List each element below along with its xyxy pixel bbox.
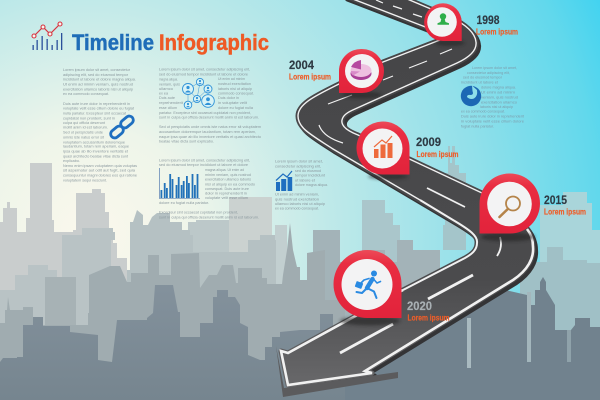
text block: centre column lower: consequat. Duis aute irure xyxy=(205,187,249,191)
road centre dashes xyxy=(319,0,501,353)
text block: far right column: consectetur adipiscing elit, xyxy=(467,71,510,75)
text block: right lower column: ex ea commodo consequat. xyxy=(275,206,319,210)
text block: centre column upper: sed do eiusmod tempor incididunt ut labore et dolore xyxy=(159,72,248,76)
bar chart xyxy=(160,168,200,198)
text block: left column: ex ea commodo consequat. xyxy=(63,92,109,96)
label: 2004 xyxy=(289,60,331,82)
text block: centre column upper: Ut enim ad minim xyxy=(218,77,245,81)
text block: left column: explicabo. xyxy=(63,159,80,163)
label: 2009: 2009 xyxy=(416,137,441,149)
text block: right lower column: consectetur adipiscing elit, xyxy=(275,164,321,168)
text block: left column: omnis iste natus error sit xyxy=(63,136,104,140)
text block: far right column: Lorem ipsum dolor sit amet, xyxy=(472,66,517,70)
title with chart icon xyxy=(32,22,269,55)
text block: left column: sit aspernatur aut odit aut fugit, sed quia xyxy=(63,168,136,172)
text block: far right column: ex ea commodo consequat. xyxy=(461,110,505,114)
text block: centre column upper: beatae vitae dicta sunt explicabo. xyxy=(159,140,214,144)
text block: far right column: in voluptate velit esse cillum dolore xyxy=(461,120,524,124)
label: 2009 xyxy=(416,137,459,159)
label: 2020 xyxy=(407,301,450,322)
text block: far right column: sed do eiusmod tempor xyxy=(463,76,503,80)
icon: running person xyxy=(355,270,380,298)
label: 1998 xyxy=(476,15,518,36)
text block: centre column lower: sed do eiusmod tempor incididunt ut labore et dolore xyxy=(159,163,248,167)
text block: left column: mollit anim id est laborum. xyxy=(63,126,108,130)
text block: centre column upper: ex ea xyxy=(159,92,169,96)
skyline: middle layer xyxy=(0,210,600,400)
text block: left column: Nemo enim ipsam voluptatem quia voluptas xyxy=(63,164,137,168)
text block: centre column lower: dolore eu fugiat nulla pariatur. xyxy=(159,201,209,205)
text block: right lower column: dolore magna aliqua. xyxy=(295,183,328,187)
text block: centre column upper: accusantium doloremque laudantium, totam rem aperiam, xyxy=(159,130,256,134)
text block: centre column upper: Lorem ipsum dolor sit amet, consectetur adipiscing elit, xyxy=(159,68,250,72)
text block: right lower column: sed do eiusmod xyxy=(295,169,321,173)
text block: centre column upper: in voluptate velit xyxy=(218,101,247,105)
label: 1998: Lorem ipsum xyxy=(476,26,518,36)
text block: far right column: fugiat nulla pariatur. xyxy=(461,124,494,128)
text block: left column: Ut enim ad minim veniam, quis nostrud xyxy=(63,82,133,86)
pin: 2015 xyxy=(480,173,540,242)
text block: centre column upper xyxy=(159,68,261,144)
text block: far right column: incididunt ut labore et xyxy=(461,80,498,84)
text block: centre column upper: veniam, quis xyxy=(159,82,180,86)
text block: right lower column: Lorem ipsum dolor sit amet, xyxy=(275,160,323,164)
icon: magnifier xyxy=(500,196,520,217)
text block: left column: quasi architecto beatae vitae dicta sunt xyxy=(63,154,128,158)
text block: left column: consequuntur magni dolores eos qui ratione xyxy=(63,174,137,178)
label: 2020: 2020 xyxy=(407,301,432,313)
text block: centre column upper: eaque ipsa quae ab illo inventore veritatis et quasi architecto xyxy=(159,135,261,139)
text block: left column: incididunt ut labore et dolore magna aliqua. xyxy=(63,78,136,82)
text block: left column: voluptate velit esse cillum dolore eu fugiat xyxy=(63,106,134,110)
text block: far right column: exercitation ullamco xyxy=(481,100,517,104)
label: 2004: 2004 xyxy=(289,60,315,72)
icon: chain link xyxy=(109,114,135,140)
text block: centre column lower: Lorem ipsum dolor sit amet, consectetur adipiscing elit, xyxy=(159,158,250,162)
text block: centre column lower: dolor in reprehenderit in xyxy=(205,192,247,196)
skyline: near layer xyxy=(0,223,345,400)
heading: Timeline xyxy=(72,30,154,55)
text block: centre column lower: minim veniam, quis nostrud xyxy=(205,173,251,177)
text block: left column xyxy=(63,68,137,182)
skyline: front layer xyxy=(0,277,600,400)
text block: left column: culpa qui officia deserunt xyxy=(63,121,105,125)
text block: centre column lower: exercitation ullamco laboris xyxy=(205,178,251,182)
text block: centre column upper: Duis dolor in xyxy=(218,96,239,100)
icon: orange growth bars xyxy=(374,136,392,158)
text block: centre column upper: reprehenderit xyxy=(159,101,183,105)
text block: left column: adipiscing elit, sed do eiusmod tempor xyxy=(63,73,129,77)
road xyxy=(276,0,536,397)
text block: far right column: veniam, quis nostrud xyxy=(481,96,518,100)
text block: centre column upper: commodo consequat. xyxy=(218,92,254,96)
text block: right lower column xyxy=(275,160,328,210)
text block: right lower column: ut labore et xyxy=(295,178,315,182)
text block: centre column upper: Sed ut perspiciatis unde omnis iste natus error sit voluptatem xyxy=(159,125,261,129)
label: 1998: 1998 xyxy=(476,15,500,27)
text block: right lower column: Ut enim ad minim veniam, xyxy=(275,192,319,196)
icon: blue donut pie xyxy=(461,86,481,106)
text block: centre column upper: ullamco xyxy=(159,87,173,91)
title with chart icon: Infographic xyxy=(159,30,269,55)
road edge lines xyxy=(281,0,533,385)
text block: centre column upper: laboris nisi ut aliquip xyxy=(218,87,252,91)
text block: centre column lower: voluptate velit esse cillum xyxy=(205,196,248,200)
text block: centre column upper: nostrud exercitation xyxy=(218,82,251,86)
text block: centre column lower: nisi ut aliquip ex ea commodo xyxy=(205,182,255,186)
text block: centre column upper: dolore eu fugiat nulla xyxy=(218,106,254,110)
skyline: far layer xyxy=(0,146,600,400)
text block: centre column lower: magna aliqua. Ut enim ad xyxy=(205,168,244,172)
text block: left column: voluptatem accusantium doloremque xyxy=(63,140,125,144)
pin: 2004 xyxy=(339,49,384,98)
icon: person xyxy=(437,13,449,25)
text block: centre column upper: esse cillum xyxy=(159,106,177,110)
label: 2020: Lorem ipsum xyxy=(408,312,450,322)
label: 2015: Lorem ipsum xyxy=(544,206,586,216)
icon: people network xyxy=(182,78,214,109)
label: 2004: Lorem ipsum xyxy=(289,72,331,82)
text block: right lower column: ullamco laboris nisi ut aliquip xyxy=(275,202,325,206)
label: 2009: Lorem ipsum xyxy=(416,149,459,159)
text block: far right column: dolore magna aliqua. xyxy=(481,86,516,90)
label: 2015: 2015 xyxy=(544,195,568,207)
text block: far right column: laboris nisi ut aliquip xyxy=(480,105,513,109)
text block: left column: Duis aute irure dolor in reprehenderit in xyxy=(63,102,130,106)
text block: left column: nulla pariatur. Excepteur sint occaecat xyxy=(63,112,126,116)
text block: centre column upper: magna aliqua. xyxy=(159,78,178,82)
text block: centre column upper: pariatur. Excepteur sint occaecat cupidatat non proident, xyxy=(159,111,251,115)
text block: centre column upper: sunt in culpa qui officia deserunt mollit anim id est laborum. xyxy=(159,116,259,120)
text block: far right column xyxy=(461,66,524,128)
label: 2015 xyxy=(544,195,586,216)
text block: centre column lower xyxy=(159,158,259,220)
text block: left column: Sed ut perspiciatis unde xyxy=(63,130,103,134)
icon: bar and line chart xyxy=(32,22,62,50)
icon: pie chart xyxy=(350,60,372,80)
text block: left column: Lorem ipsum dolor sit amet, consectetur xyxy=(63,68,131,72)
pin: 2009 xyxy=(356,122,410,180)
text block: left column: voluptatem sequi nesciunt. xyxy=(63,178,107,182)
text block: left column: ipsa quae ab illo inventore veritatis et xyxy=(63,150,128,154)
text block: right lower column: tempor incididunt xyxy=(295,174,325,178)
pin: 1998 xyxy=(424,3,465,46)
text block: left column: laudantium, totam rem aperiam, eaque xyxy=(63,144,129,148)
text block: right lower column: quis nostrud exercitation xyxy=(275,198,319,202)
text block: centre column lower: Excepteur sint occaecat cupidatat non proident, xyxy=(159,210,238,214)
text block: left column: exercitation ullamco laboris nisi ut aliquip xyxy=(63,88,133,92)
pin: 2020 xyxy=(334,250,402,326)
icon: growth bars xyxy=(276,171,292,191)
text block: centre column upper: Duis aute xyxy=(159,96,175,100)
text block: centre column lower: sunt in culpa qui officia deserunt mollit anim id est laborum. xyxy=(159,216,259,220)
text block: far right column: Ut enim ad minim xyxy=(481,90,515,94)
text block: left column: cupidatat non proident, sunt in xyxy=(63,116,115,120)
text block: far right column: Duis aute irure dolor in reprehenderit xyxy=(461,114,524,118)
